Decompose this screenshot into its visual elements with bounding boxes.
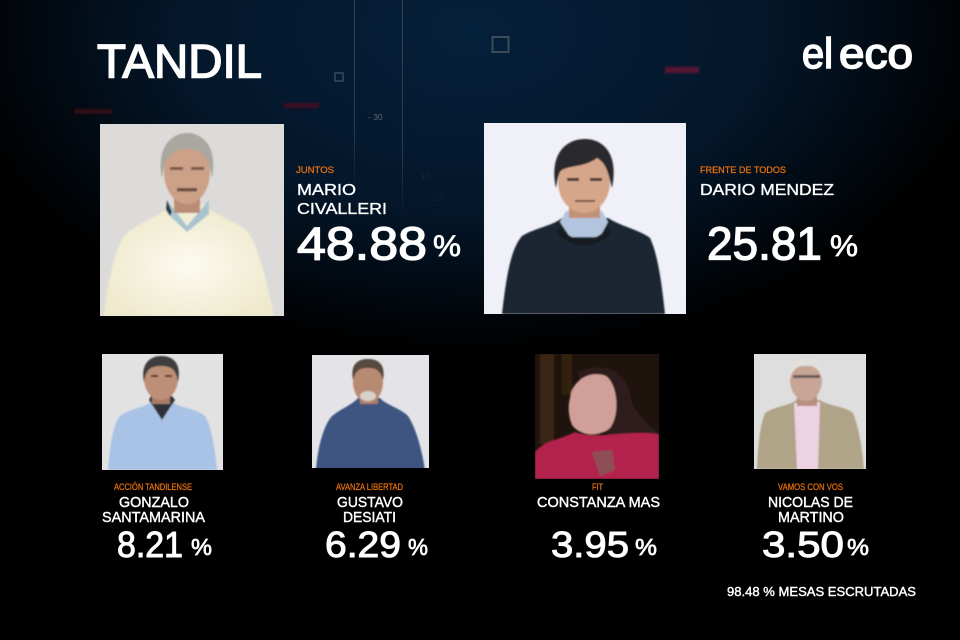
- background: - 10: [414, 172, 432, 183]
- candidate: Mario Civalleri: JUNTOS: [296, 165, 334, 175]
- candidate: Gonzalo Santamarina: ACCIÓN TANDILENSE: [114, 482, 192, 492]
- title: TANDIL: [97, 34, 262, 88]
- photo: Constanza Mas: [535, 354, 659, 479]
- candidate: Dario Mendez: [700, 165, 858, 270]
- background: - 20: [425, 193, 443, 204]
- candidate: Nicolas De Martino: VAMOS CON VOS: [778, 482, 843, 492]
- candidate: Nicolas De Martino: %: [847, 534, 869, 560]
- photo: Nicolas De Martino: [754, 354, 866, 469]
- candidate: Mario Civalleri: CIVALLERI: [297, 201, 387, 218]
- candidate: Nicolas De Martino: [762, 482, 869, 565]
- candidate: Mario Civalleri: %: [433, 230, 461, 263]
- candidate: Nicolas De Martino: MARTINO: [778, 510, 844, 526]
- footnote: mesas escrutadas: 98.48 % MESAS ESCRUTADAS: [727, 585, 916, 599]
- candidate: Mario Civalleri: MARIO: [297, 182, 356, 199]
- logo: el eco: el: [802, 30, 833, 78]
- candidate: Dario Mendez: 25.81: [707, 218, 822, 270]
- candidate: Gonzalo Santamarina: %: [191, 534, 212, 560]
- photo: Dario Mendez: [484, 123, 686, 314]
- candidate: Gonzalo Santamarina: [102, 482, 212, 565]
- candidate: Gustavo Desiati: DESIATI: [343, 510, 396, 526]
- candidate: Nicolas De Martino: 3.50: [762, 524, 844, 565]
- photo: Gustavo Desiati: [312, 355, 429, 470]
- logo: el eco: [802, 30, 913, 78]
- candidate: Constanza Mas: %: [635, 534, 657, 560]
- candidate: Mario Civalleri: 48.88: [297, 218, 427, 270]
- photo: Mario Civalleri: [100, 124, 284, 316]
- candidate: Constanza Mas: FIT: [592, 482, 603, 492]
- candidate: Gustavo Desiati: 6.29: [325, 524, 401, 565]
- logo: el eco: eco: [839, 30, 913, 78]
- candidate: Constanza Mas: 3.95: [551, 524, 629, 565]
- candidate: Constanza Mas: [537, 482, 660, 565]
- candidate: Constanza Mas: CONSTANZA MAS: [537, 495, 660, 511]
- candidate: Gonzalo Santamarina: SANTAMARINA: [102, 510, 205, 526]
- candidate: Dario Mendez: %: [830, 230, 858, 263]
- candidate: Dario Mendez: FRENTE DE TODOS: [700, 165, 786, 175]
- candidate: Gustavo Desiati: %: [408, 534, 428, 560]
- candidate: Dario Mendez: DARIO MENDEZ: [700, 182, 834, 199]
- candidate: Mario Civalleri: [296, 165, 461, 270]
- background: - 30: [368, 112, 383, 122]
- candidate: Nicolas De Martino: NICOLAS DE: [768, 495, 853, 511]
- candidate: Gustavo Desiati: [325, 482, 428, 565]
- candidate: Gonzalo Santamarina: 8.21: [117, 524, 183, 565]
- candidate: Gustavo Desiati: GUSTAVO: [337, 495, 403, 511]
- candidate: Gustavo Desiati: AVANZA LIBERTAD: [336, 482, 403, 492]
- photo: Gonzalo Santamarina: [102, 354, 223, 470]
- candidate: Gonzalo Santamarina: GONZALO: [119, 495, 189, 511]
